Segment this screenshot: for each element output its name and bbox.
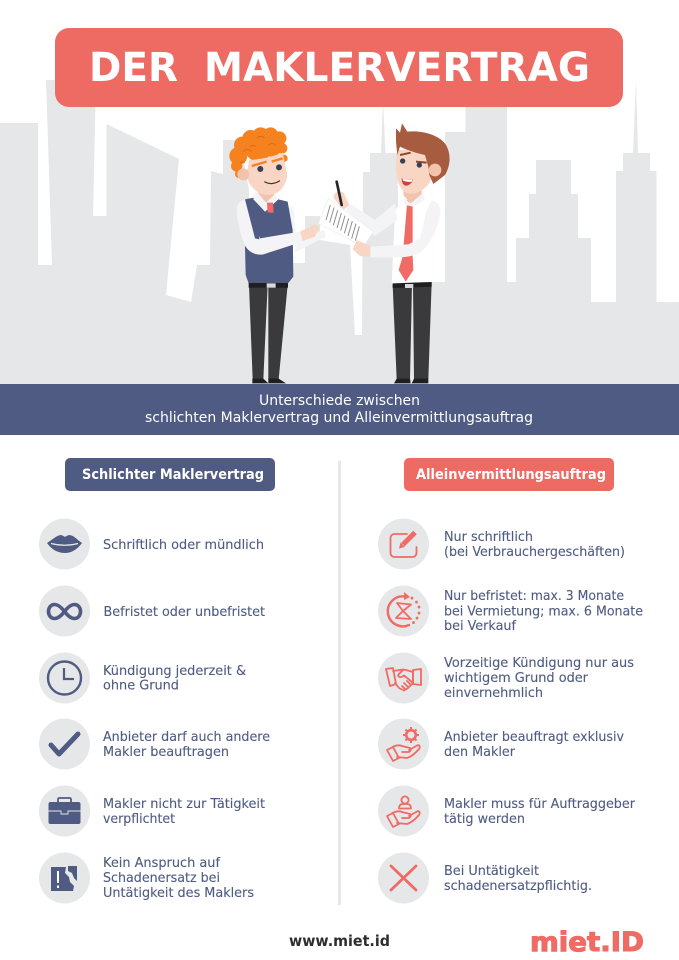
row: nicht zur Tätigkeit verpflichtet: verpflichtet [103,812,175,827]
illustration: two men signing a contract [229,123,450,383]
footer url: www.miet.id [289,932,390,950]
subtitle band: Unterschiede zwischen [259,393,420,409]
column divider [338,461,341,905]
row: kein Schadenersatz [39,852,254,904]
row: nicht zur Tätigkeit verpflichtet: Makler nicht zur Tätigkeit [103,797,265,812]
skyline background [0,80,679,384]
row: schadenersatzpflichtig [378,852,592,904]
heading: Alleinvermittlungsauftrag: Alleinvermittlungsauftrag [416,467,606,483]
subtitle band: schlichten Maklervertrag und Alleinvermittlungsauftrag [145,410,533,426]
row: befristet oder unbefristet: Befristet oder unbefristet [104,605,265,620]
row: schadenersatzpflichtig: schadenersatzpflichtig. [444,879,592,894]
row: vorzeitige Kündigung: wichtigem Grund oder [444,671,588,686]
row: muss tätig werden: tätig werden [444,812,525,827]
row: vorzeitige Kündigung: Vorzeitige Kündigung nur aus [444,656,634,671]
signed paper and pen [318,182,373,257]
row: nur schriftlich [378,518,625,570]
row: schadenersatzpflichtig: Bei Untätigkeit [444,864,539,879]
heading: Alleinvermittlungsauftrag [404,458,614,491]
left man [229,127,326,383]
row: schriftlich oder mündlich [39,518,264,570]
subtitle band [0,384,679,435]
heading: Schlichter Maklervertrag [65,458,275,491]
row: vorzeitige Kündigung: einvernehmlich [444,686,543,701]
row: schriftlich oder mündlich: Schriftlich oder mündlich [103,538,264,553]
row: nur befristet [378,586,643,636]
title banner [55,28,623,107]
row: kündigung jederzeit: ohne Grund [103,678,179,694]
row: befristet oder unbefristet [39,586,265,636]
row: beauftragt exklusiv: Anbieter beauftragt exklusiv [444,730,624,745]
row: kein Schadenersatz: Schadenersatz bei [103,871,220,886]
row: andere Makler beauftragen: Anbieter darf auch andere [103,730,270,745]
row: nur schriftlich: (bei Verbrauchergeschäften) [444,545,625,560]
row: vorzeitige Kündigung [378,652,634,704]
title banner: MAKLERVERTRAG [204,45,590,91]
row: nur befristet: bei Verkauf [444,619,516,634]
panel: Schlichter Maklervertrag [39,458,275,904]
row: kündigung jederzeit: Kündigung jederzeit & [103,664,247,679]
logo: miet.ID: miet.ID [530,927,644,958]
row: muss tätig werden: Makler muss für Auftraggeber [444,797,635,812]
row: kündigung jederzeit [39,652,247,704]
title banner: DER [89,45,178,91]
row: nur befristet: Nur befristet: max. 3 Monate [444,589,624,604]
row: andere Makler beauftragen: Makler beauftragen [103,745,229,760]
row: nur schriftlich: Nur schriftlich [444,530,533,545]
row: nur befristet: bei Vermietung; max. 6 Monate [444,604,643,620]
row: andere Makler beauftragen [39,718,270,770]
row: beauftragt exklusiv [378,718,624,770]
right man [346,123,450,383]
heading: Schlichter Maklervertrag: Schlichter Maklervertrag [82,467,264,483]
row: nicht zur Tätigkeit verpflichtet [39,786,265,836]
row: kein Schadenersatz: Kein Anspruch auf [103,856,220,871]
row: beauftragt exklusiv: den Makler [444,745,515,760]
panel: Alleinvermittlungsauftrag [378,458,643,904]
row: kein Schadenersatz: Untätigkeit des Maklers [103,886,254,901]
row: muss tätig werden [378,786,635,836]
